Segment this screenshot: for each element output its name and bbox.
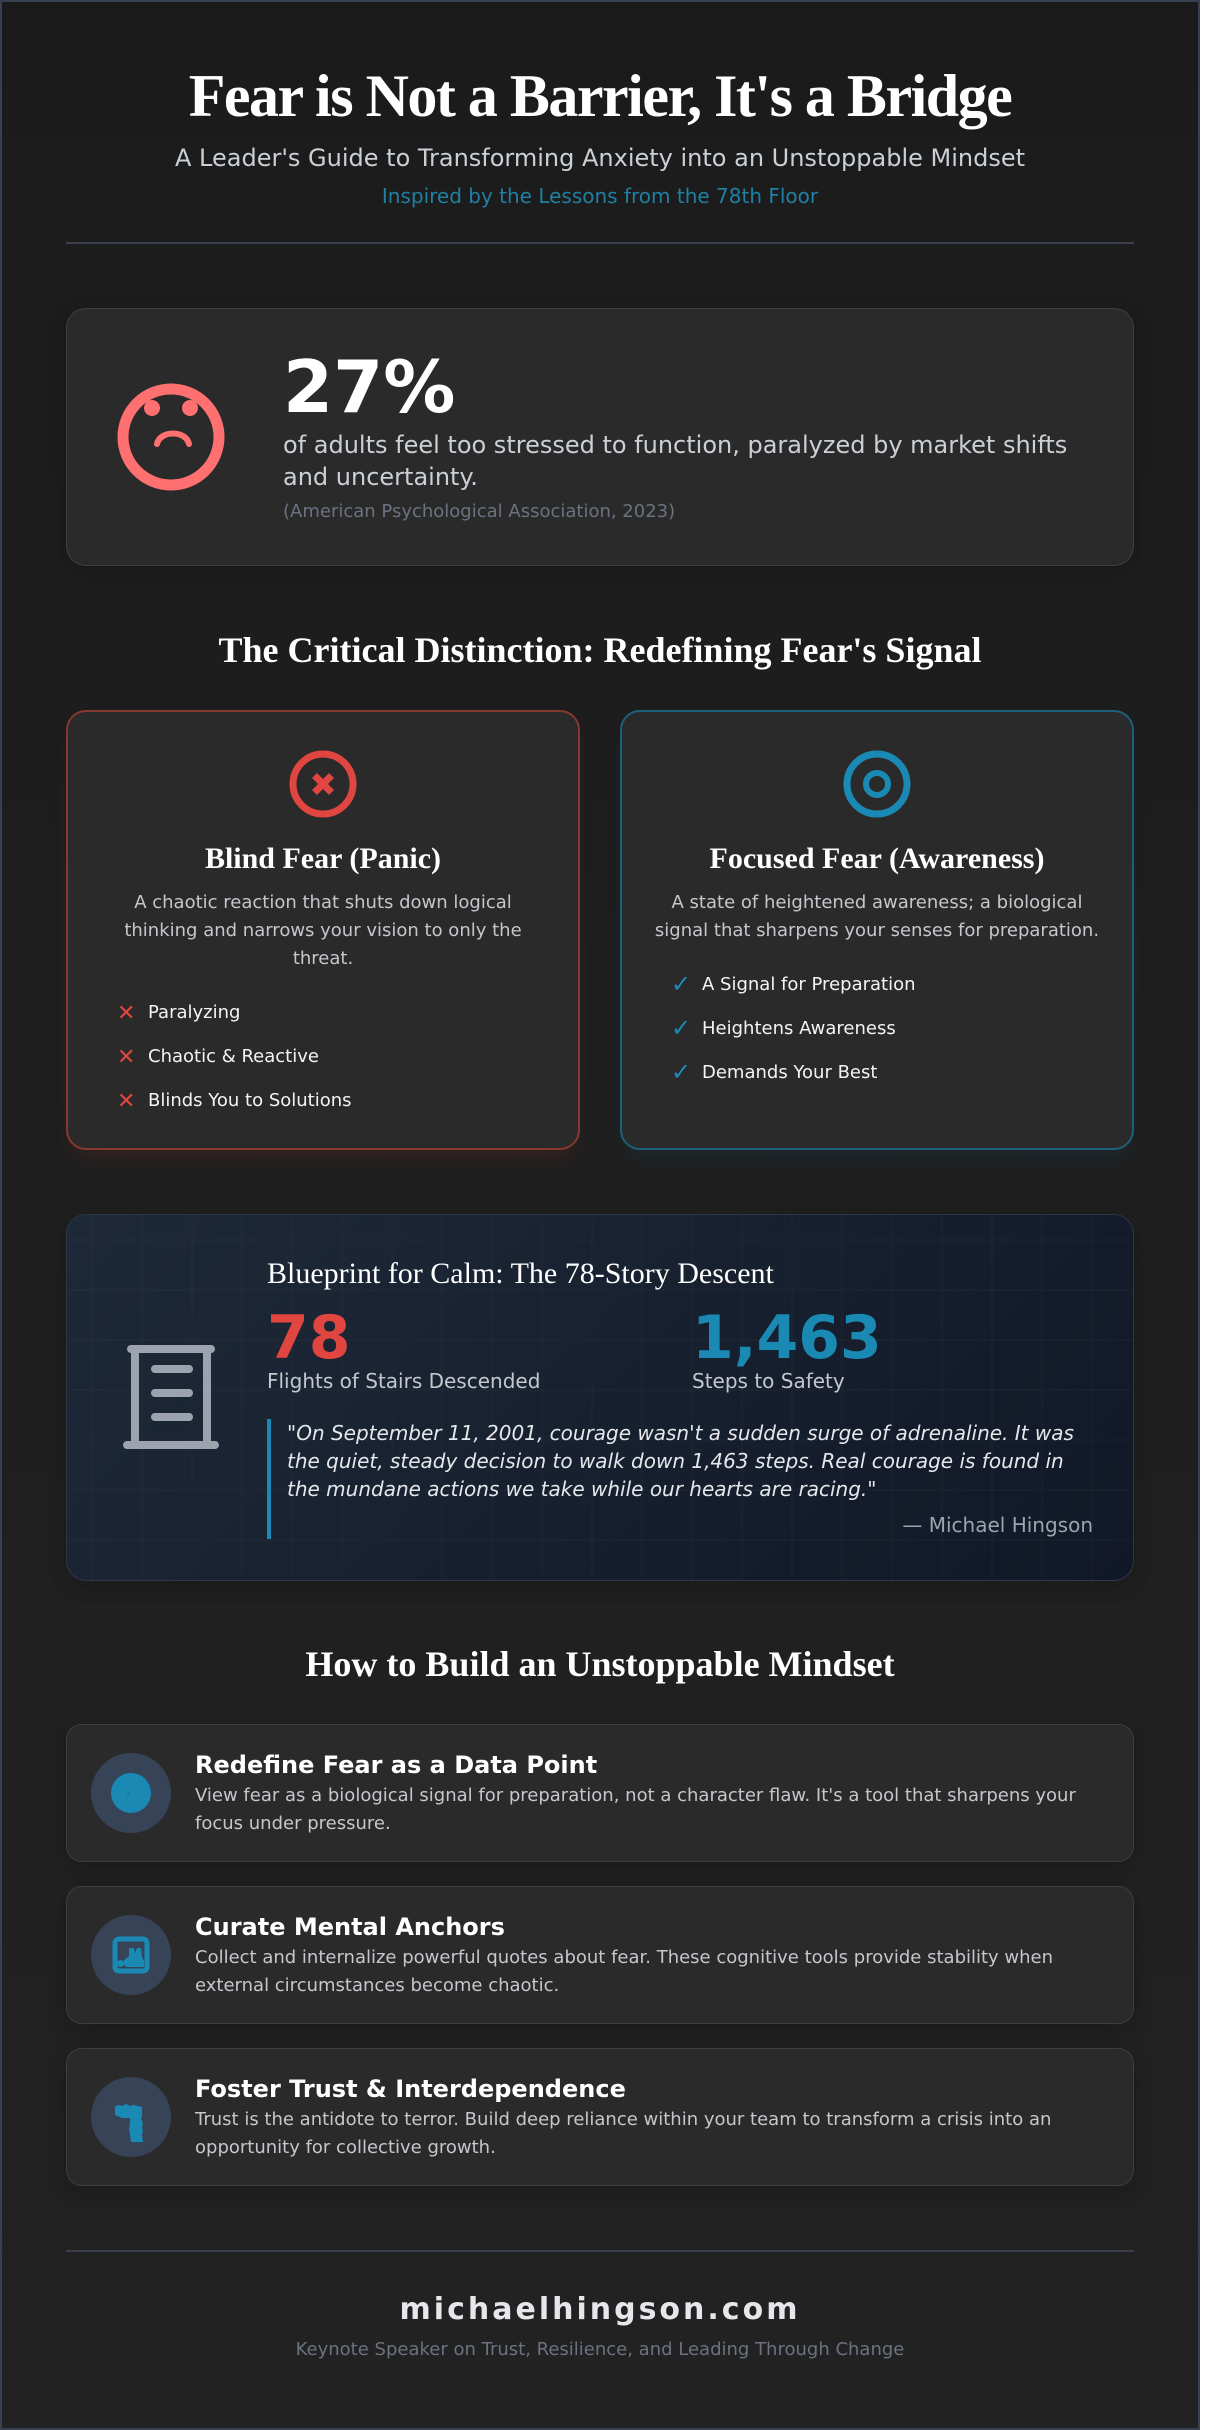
description (194, 2109, 1051, 2158)
card description: thinking and narrows your vision to only the (124, 920, 522, 941)
stat description (283, 431, 1067, 491)
quote text: the mundane actions we take while our hearts are racing." (287, 1477, 876, 1501)
card description (655, 892, 1099, 941)
description: View fear as a biological signal for preparation, not a character flaw. It's a tool that sharpens your (195, 1785, 1076, 1806)
icon: sad face (118, 384, 224, 490)
stat: steps (692, 1303, 882, 1393)
card description: A chaotic reaction that shuts down logical (134, 892, 512, 913)
item: ✓ (671, 1014, 691, 1042)
quote text: "On September 11, 2001, courage wasn't a sudden surge of adrenaline. It was (287, 1421, 1074, 1445)
subtitle: A Leader's Guide to Transforming Anxiety into an Unstoppable Mindset (175, 144, 1025, 172)
number: 1,463 (692, 1303, 882, 1373)
label: Flights of Stairs Descended (267, 1369, 540, 1393)
icon: anchors (91, 1915, 171, 1995)
label: Steps to Safety (692, 1369, 845, 1393)
panel: mental anchors (66, 1886, 1134, 2024)
source: (American Psychological Association, 2023) (283, 501, 675, 522)
panel: blind fear (66, 710, 580, 1150)
description (195, 1947, 1053, 1996)
item: ✓ (671, 1058, 691, 1086)
card title: Focused Fear (Awareness) (710, 842, 1044, 875)
description: focus under pressure. (195, 1813, 391, 1834)
list (671, 970, 916, 1086)
item: Demands Your Best (702, 1062, 877, 1083)
title: Foster Trust & Interdependence (195, 2075, 626, 2103)
heading: how to build: How to Build an Unstoppable Mindset (305, 1644, 895, 1684)
item: ✕ (117, 1089, 135, 1114)
stat description: of adults feel too stressed to function, paralyzed by market shifts (283, 431, 1067, 459)
item: Blinds You to Solutions (148, 1090, 352, 1111)
description: Collect and internalize powerful quotes about fear. These cognitive tools provide stability when (195, 1947, 1053, 1968)
icon: target (844, 750, 910, 818)
stat number: 27% (283, 345, 455, 429)
title: Redefine Fear as a Data Point (195, 1751, 597, 1779)
number: 78 (267, 1303, 350, 1373)
item (671, 1058, 877, 1086)
quote (267, 1419, 1093, 1539)
heading: critical distinction: The Critical Distinction: Redefining Fear's Signal (218, 630, 981, 670)
footer tagline: Keynote Speaker on Trust, Resilience, and Leading Through Change (296, 2339, 904, 2360)
item: Chaotic & Reactive (148, 1046, 319, 1067)
panel: focused fear (620, 710, 1134, 1150)
quote text: the quiet, steady decision to walk down 1,463 steps. Real courage is found in (287, 1449, 1064, 1473)
icon: x circle (290, 750, 356, 818)
card title: Blind Fear (Panic) (205, 842, 441, 875)
item: ✕ (117, 1001, 135, 1026)
description (195, 1785, 1076, 1834)
icon: trust (91, 2077, 171, 2157)
item: Heightens Awareness (702, 1018, 896, 1039)
item: Paralyzing (148, 1002, 240, 1023)
icon: data point (91, 1753, 171, 1833)
item: ✕ (117, 1045, 135, 1070)
stat: flights (267, 1303, 540, 1393)
item: A Signal for Preparation (702, 974, 916, 995)
panel: redefine fear (66, 1724, 1134, 1862)
title: Fear is Not a Barrier, It's a Bridge (189, 63, 1011, 129)
list (117, 1001, 352, 1114)
item: ✓ (671, 970, 691, 998)
panel heading: Blueprint for Calm: The 78-Story Descent (267, 1257, 774, 1290)
icon: staircase (123, 1345, 219, 1449)
header (175, 63, 1025, 208)
website: michaelhingson.com (400, 2292, 800, 2327)
item (117, 1001, 240, 1026)
tagline: Inspired by the Lessons from the 78th Floor (382, 184, 818, 208)
description: Trust is the antidote to terror. Build deep reliance within your team to transform a crisis into an (195, 2109, 1051, 2130)
card description (124, 892, 522, 969)
panel: statistic (66, 308, 1134, 566)
item (671, 1014, 896, 1042)
panel: blueprint for calm (66, 1214, 1134, 1581)
card description: threat. (293, 948, 353, 969)
quote text (287, 1421, 1074, 1501)
description: external circumstances become chaotic. (195, 1975, 559, 1996)
stat description: and uncertainty. (283, 463, 478, 491)
card description: signal that sharpens your senses for preparation. (655, 920, 1099, 941)
description: opportunity for collective growth. (195, 2137, 496, 2158)
panel: trust (66, 2048, 1134, 2186)
card description: A state of heightened awareness; a biological (672, 892, 1082, 913)
footer (296, 2292, 904, 2360)
item (671, 970, 916, 998)
title: Curate Mental Anchors (195, 1913, 505, 1941)
attribution: — Michael Hingson (902, 1513, 1093, 1537)
